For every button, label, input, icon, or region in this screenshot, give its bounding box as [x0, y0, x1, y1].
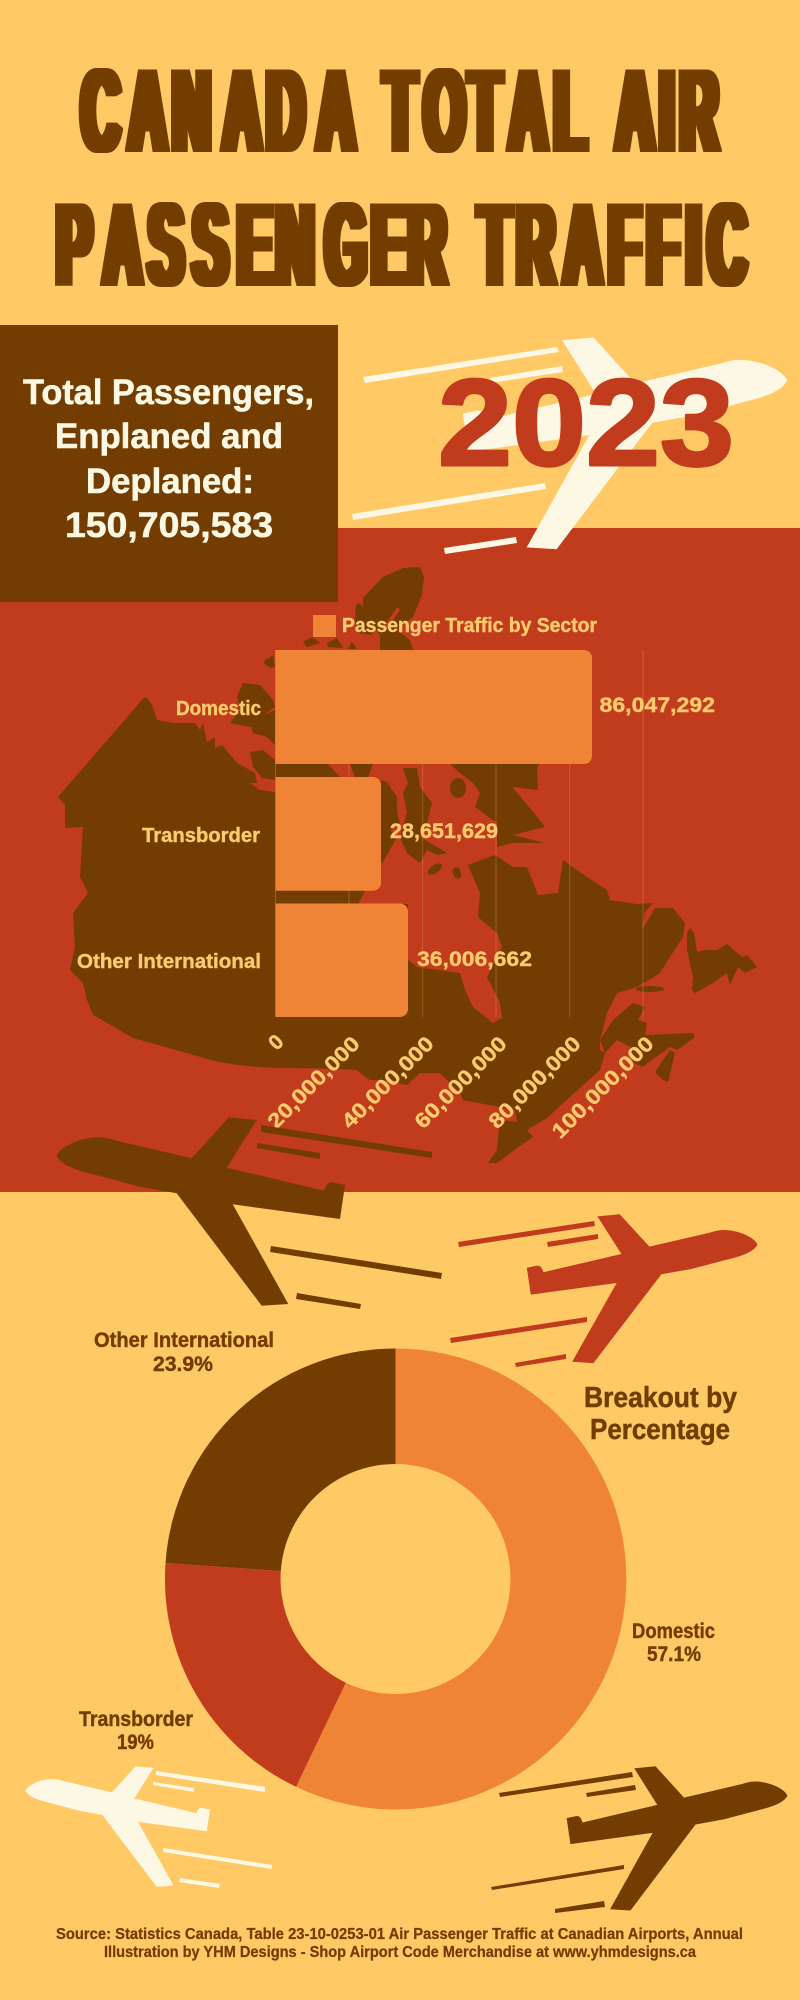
axis tick labels: 60,000,000: [410, 1032, 512, 1133]
panel: total passengers box: [0, 325, 338, 602]
icon: brown airplane with speed lines: [57, 1117, 442, 1309]
bar: transborder: Transborder: [142, 825, 260, 847]
icon: cream airplane with speed lines: [352, 337, 787, 554]
slice: domestic 57.1%: [296, 1348, 626, 1809]
axis tick labels: 100,000,000: [548, 1032, 659, 1143]
donut chart: breakout by percentage: [165, 1348, 626, 1809]
footer: source and credit: Source: Statistics Canada, Table 23-10-0253-01 Air Passenger Traffic at Canadian Airports, Annual: [56, 1926, 743, 1943]
bar chart: passenger traffic by sector: [77, 615, 715, 1143]
bar: other international: 36,006,662: [417, 948, 532, 971]
heading: breakout by percentage: Percentage: [590, 1414, 730, 1446]
heading: breakout by percentage: Breakout by: [584, 1382, 737, 1414]
axis tick labels: 0: [264, 1030, 289, 1055]
donut label: domestic: [632, 1620, 715, 1666]
donut label: domestic: 57.1%: [647, 1643, 701, 1666]
icon: red airplane with speed lines: [450, 1214, 757, 1367]
donut label: other international: 23.9%: [153, 1353, 213, 1376]
bar: transborder: [142, 777, 498, 891]
title: [57, 47, 746, 311]
axis tick labels: 80,000,000: [484, 1032, 586, 1133]
bar: other international: [77, 904, 532, 1017]
bar: transborder: 28,651,629: [390, 820, 498, 843]
axis tick labels: 40,000,000: [337, 1032, 439, 1133]
bar: domestic: [176, 650, 715, 764]
legend: Passenger Traffic by Sector: [342, 615, 597, 637]
footer: source and credit: Illustration by YHM Designs - Shop Airport Code Merchandise at www.yhmdesigns.ca: [104, 1944, 696, 1961]
panel: total passengers box: Deplaned:: [86, 462, 254, 501]
slice: other international 23.9%: [166, 1348, 396, 1571]
title: CANADA TOTAL AIR: [81, 47, 718, 177]
panel: total passengers box: 150,705,583: [65, 506, 273, 545]
bar: domestic: Domestic: [176, 698, 261, 720]
donut label: transborder: [79, 1708, 193, 1754]
donut label: other international: [94, 1329, 274, 1376]
heading: breakout by percentage: [584, 1382, 737, 1446]
map of Canada silhouette: [58, 567, 757, 1163]
bar: other international: Other International: [77, 951, 261, 973]
icon: brown airplane lower right with speed lines: [491, 1766, 787, 1913]
bar: domestic: 86,047,292: [600, 694, 715, 717]
title: PASSENGER TRAFFIC: [57, 181, 746, 311]
panel: red map band: [0, 528, 800, 1192]
panel: total passengers box: Total Passengers,: [23, 373, 314, 412]
axis tick labels: [263, 1030, 659, 1143]
year heading: 2023: [438, 355, 734, 492]
icon: small cream airplane with speed lines: [25, 1766, 272, 1888]
slice: transborder 19%: [165, 1563, 346, 1787]
panel: total passengers box: Enplaned and: [55, 417, 283, 456]
footer: source and credit: [56, 1926, 743, 1961]
donut label: transborder: 19%: [117, 1731, 154, 1754]
donut label: other international: Other International: [94, 1329, 274, 1352]
axis tick labels: 20,000,000: [263, 1032, 365, 1133]
donut label: transborder: Transborder: [79, 1708, 193, 1731]
donut label: domestic: Domestic: [632, 1620, 715, 1643]
